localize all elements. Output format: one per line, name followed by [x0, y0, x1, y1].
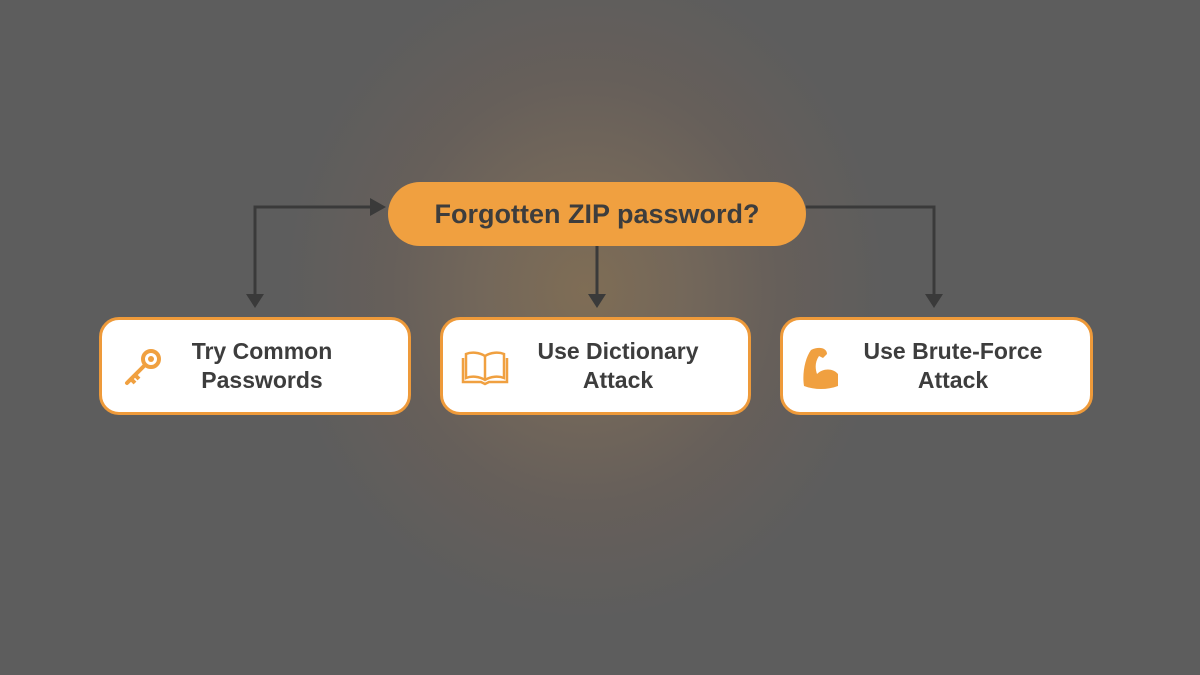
text: Attack	[583, 367, 653, 393]
title pill: Forgotten ZIP password?	[434, 198, 760, 228]
text	[192, 338, 332, 393]
text: Use Brute-Force	[864, 338, 1042, 364]
icon: book	[462, 351, 508, 386]
text	[537, 338, 699, 393]
panel: dictionary	[440, 317, 751, 415]
panel: brute force	[780, 317, 1093, 415]
text: Attack	[918, 367, 988, 393]
text: Passwords	[201, 367, 323, 393]
title pill	[388, 182, 806, 246]
text: Try Common	[192, 338, 332, 364]
text: Use Dictionary	[537, 338, 699, 364]
icon: key	[124, 349, 161, 386]
text	[864, 338, 1042, 393]
panel: common passwords	[99, 317, 411, 415]
icon: muscle arm	[803, 348, 838, 389]
